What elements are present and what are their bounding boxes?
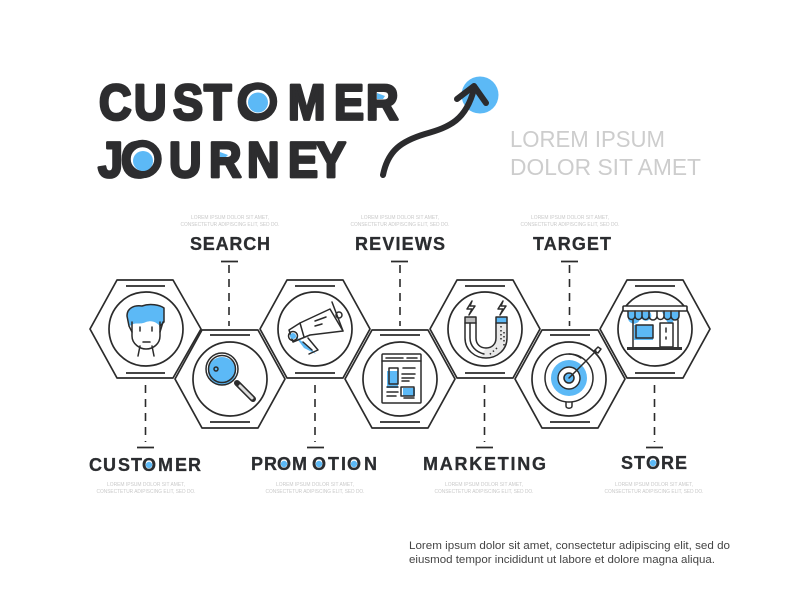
callout: search: LOREM IPSUM DOLOR SIT AMET, — [191, 215, 269, 221]
callout: target — [520, 215, 620, 326]
callout: customer: CUSTOMER — [89, 455, 201, 475]
hexagon: marketing — [430, 280, 540, 378]
icon: target and arrow — [545, 347, 601, 408]
callout: target: CONSECTETUR ADIPISCING ELIT, SED DO. — [520, 222, 620, 228]
callout: reviews: REVIEWS — [355, 234, 445, 254]
callout: search: SEARCH — [190, 234, 270, 254]
hexagon: promotion — [260, 280, 370, 378]
callout: customer: CONSECTETUR ADIPISCING ELIT, SED DO. — [96, 489, 196, 495]
callout: marketing: LOREM IPSUM DOLOR SIT AMET, — [445, 482, 523, 488]
callout: customer: LOREM IPSUM DOLOR SIT AMET, — [107, 482, 185, 488]
title — [98, 75, 399, 189]
callout: search: CONSECTETUR ADIPISCING ELIT, SED DO. — [180, 222, 280, 228]
callout: promotion — [251, 385, 377, 495]
hexagon: reviews — [345, 330, 455, 428]
icon: megaphone — [288, 302, 343, 354]
callout: marketing: MARKETING — [423, 454, 546, 474]
icon: magnifying glass — [206, 353, 253, 399]
arrow — [383, 76, 498, 175]
text block: footer paragraph: Lorem ipsum dolor sit amet, consectetur adipiscing elit, sed do — [409, 540, 730, 552]
callout: reviews: LOREM IPSUM DOLOR SIT AMET, — [361, 215, 439, 221]
icon: customer face — [127, 305, 164, 356]
callout: promotion: PROMOTION — [251, 454, 377, 474]
title: CUSTOMER — [99, 75, 399, 131]
hexagon: store — [600, 280, 710, 378]
hexagon: customer — [90, 280, 201, 378]
callout: target: LOREM IPSUM DOLOR SIT AMET, — [531, 215, 609, 221]
text block: footer paragraph — [409, 540, 730, 566]
subtitle — [510, 126, 701, 180]
callout: marketing: CONSECTETUR ADIPISCING ELIT, SED DO. — [434, 489, 534, 495]
callout: store: STORE — [621, 453, 687, 473]
hexagon: target — [515, 330, 625, 428]
callout: store: LOREM IPSUM DOLOR SIT AMET, — [615, 482, 693, 488]
callout: reviews — [350, 215, 450, 326]
subtitle: DOLOR SIT AMET — [510, 154, 701, 180]
callout: search — [180, 215, 280, 326]
subtitle: LOREM IPSUM — [510, 126, 665, 152]
callout: promotion: LOREM IPSUM DOLOR SIT AMET, — [276, 482, 354, 488]
icon: storefront — [623, 306, 687, 350]
callout: target: TARGET — [533, 234, 611, 254]
callout: promotion: CONSECTETUR ADIPISCING ELIT, SED DO. — [266, 489, 364, 495]
text block: footer paragraph: eiusmod tempor incididunt ut labore et dolore magna aliqua. — [409, 554, 715, 566]
title: JOURNEY — [98, 133, 346, 189]
hexagon: search — [175, 330, 285, 428]
callout: store — [604, 385, 704, 495]
callout: marketing — [423, 385, 546, 495]
callout: store: CONSECTETUR ADIPISCING ELIT, SED DO. — [604, 489, 704, 495]
icon: newspaper — [382, 354, 421, 403]
icon: magnet — [465, 301, 507, 358]
callout: reviews: CONSECTETUR ADIPISCING ELIT, SED DO. — [350, 222, 450, 228]
callout: customer — [89, 385, 201, 495]
